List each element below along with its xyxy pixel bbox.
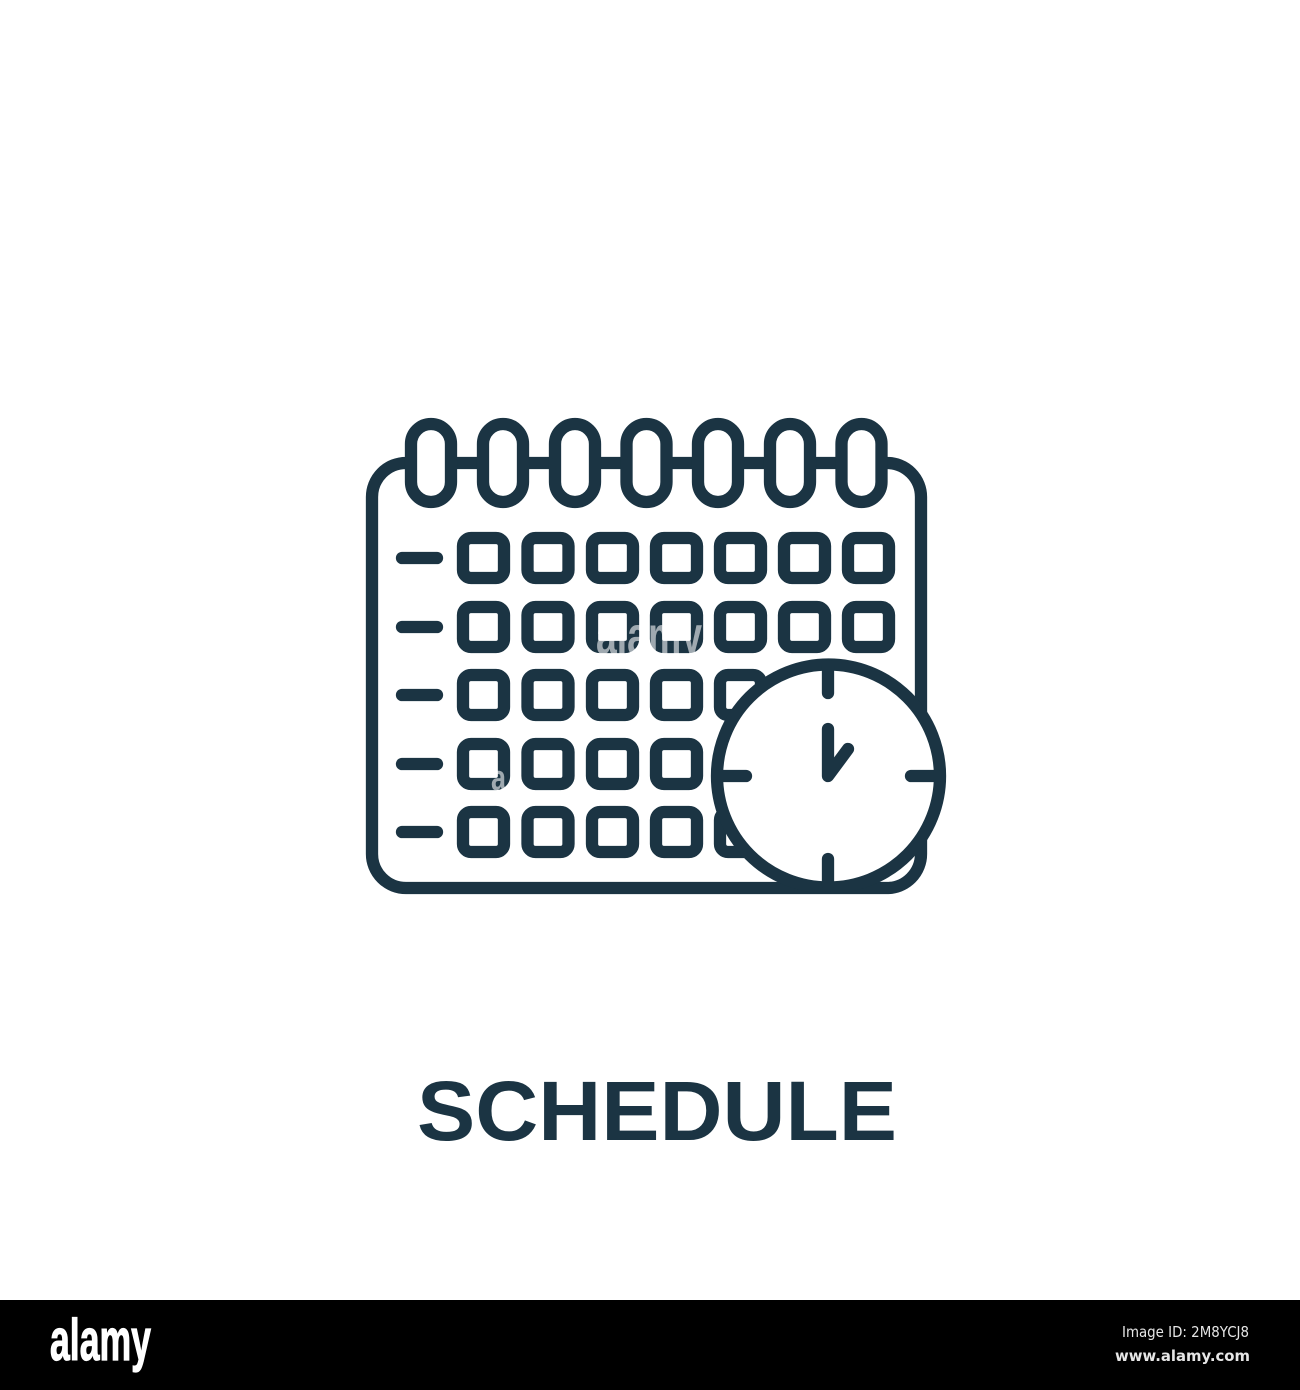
footer band [0,1300,1300,1390]
watermark fragments [491,606,702,798]
title: SCHEDULE [417,1064,897,1158]
day cell grid [463,538,889,852]
brand logo: alamy [50,1308,151,1373]
watermark fragments: alamy [596,606,702,666]
icon: calendar with clock [372,424,940,888]
watermark fragments: a [491,757,507,798]
row marker dashes [402,558,437,832]
image id: Image ID: 2M8YCJ8 [1122,1324,1249,1341]
calendar body [372,463,921,888]
website: www.alamy.com [1115,1347,1250,1365]
clock face [717,664,940,888]
spiral binding rings [411,424,882,502]
